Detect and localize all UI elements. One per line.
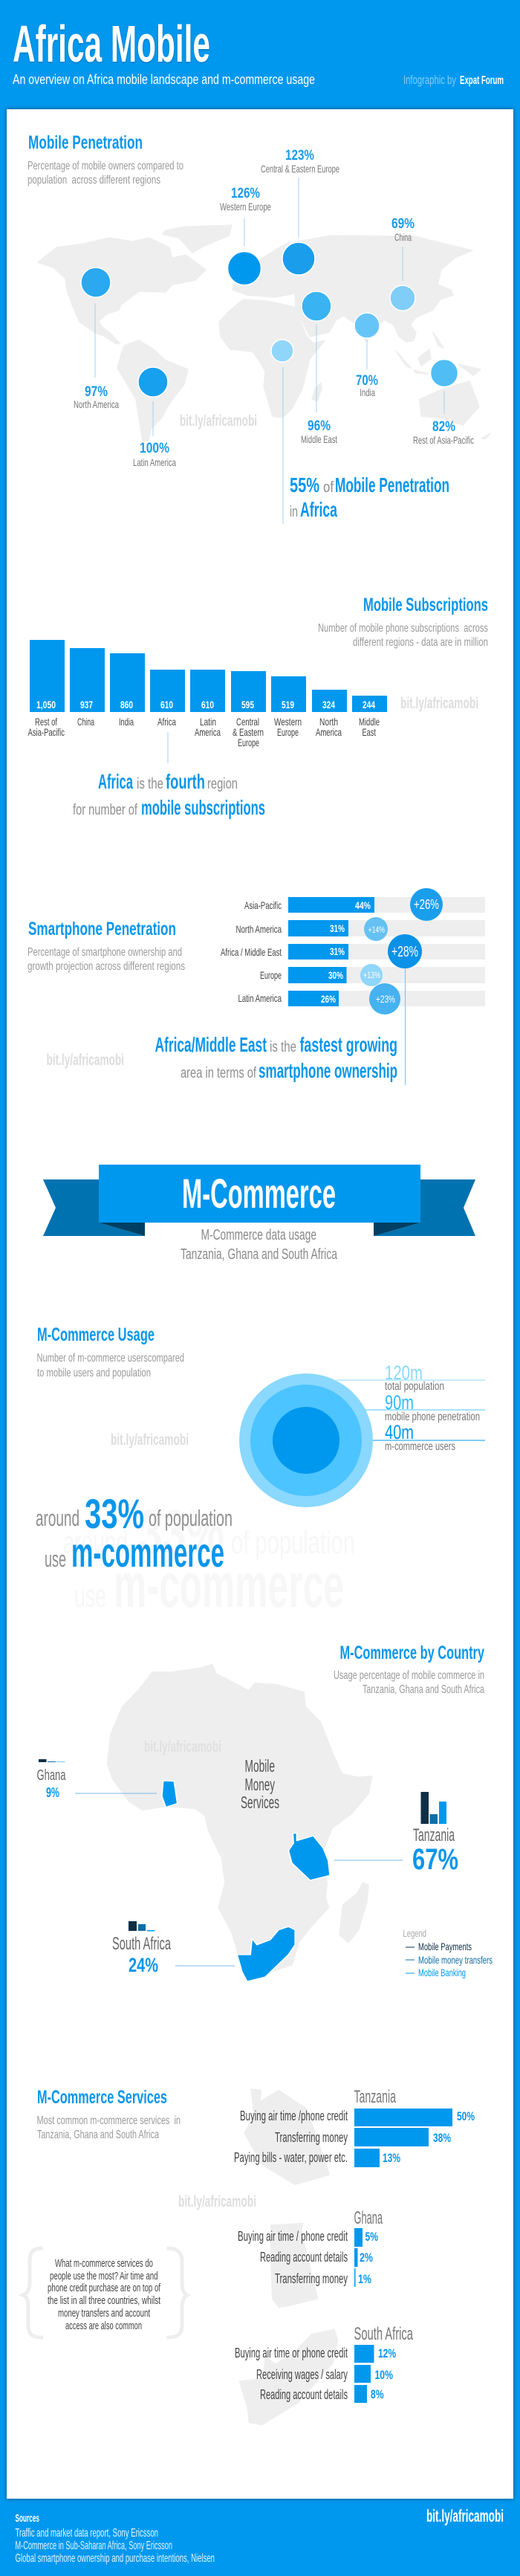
callout: of population <box>149 1505 233 1531</box>
ghana stat: Ghana <box>37 1767 66 1784</box>
quote with braces: access are also common <box>65 2320 142 2332</box>
callout: m-commerce <box>71 1529 224 1576</box>
label: central and eastern europe <box>261 148 339 175</box>
bar chart: 324 <box>322 699 335 711</box>
bar chart: south africa <box>235 2324 413 2403</box>
bar chart: 31% <box>330 945 345 957</box>
callout: around <box>36 1505 79 1531</box>
bar chart: America <box>316 726 342 738</box>
watermark: bit.ly/africamobi <box>111 1431 189 1449</box>
callout: smartphone ownership <box>259 1059 397 1082</box>
callout: 55% <box>290 473 319 496</box>
ghost text echo: m-commerce <box>114 1550 344 1620</box>
bar chart: tanzania: 38% <box>433 2131 451 2145</box>
label: north america: 97% <box>85 384 108 400</box>
map label: Money <box>245 1775 275 1794</box>
label: india: India <box>360 386 375 398</box>
bar chart: North America <box>236 923 282 935</box>
bar chart: Europe <box>277 726 299 738</box>
panel: smartphone penetration <box>27 888 485 1085</box>
ribbon subtitle <box>181 1227 338 1263</box>
bar chart: south africa: Buying air time or phone credit <box>235 2346 348 2360</box>
description: population across different regions <box>27 174 160 187</box>
stat: total population: 120m <box>385 1362 423 1384</box>
panel: m-commerce services <box>23 2087 475 2425</box>
label: china <box>391 216 415 243</box>
bar chart: 595 <box>241 699 254 711</box>
label: india <box>356 373 378 398</box>
watermark: bit.ly/africamobi <box>144 1738 221 1755</box>
callout: 33% <box>85 1490 144 1537</box>
description <box>37 1352 184 1379</box>
bar chart <box>28 640 387 748</box>
stat: mobile phone penetration <box>365 1391 485 1423</box>
callout: fastest growing <box>300 1033 397 1056</box>
sources list: M-Commerce in Sub-Saharan Africa, Sony Ericsson <box>15 2540 172 2552</box>
description: Percentage of mobile owners compared to <box>27 160 183 172</box>
growth bubble: north america: +14% <box>368 925 385 935</box>
ghost text echo <box>63 1497 355 1620</box>
panel: m-commerce usage <box>36 1324 485 1620</box>
bar chart: south africa: Receiving wages / salary <box>256 2367 348 2382</box>
heading: M-Commerce Services <box>37 2087 167 2108</box>
ghost text echo: of population <box>231 1524 355 1561</box>
label: latin america: 100% <box>140 441 169 456</box>
callout: use <box>45 1546 66 1572</box>
circle: china <box>390 285 415 311</box>
description: Number of m-commerce userscompared <box>37 1352 184 1365</box>
bar chart: East <box>363 726 376 738</box>
watermark: bit.ly/africamobi <box>180 412 257 430</box>
bar chart: Rest of <box>35 716 57 728</box>
bar chart: tanzania: Transferring money <box>275 2130 348 2145</box>
country shape: ghana <box>162 1781 178 1808</box>
callout: region <box>207 776 238 792</box>
bar chart: ghana <box>238 2208 383 2287</box>
callout: Africa/Middle East <box>155 1033 267 1056</box>
bar chart: ghana: 5% <box>365 2230 378 2244</box>
sources heading: Sources <box>15 2512 39 2525</box>
bar chart: 519 <box>282 699 294 711</box>
label: rest of asia-pacific: Rest of Asia-Pacific <box>413 434 474 446</box>
stat: mobile phone penetration: mobile phone penetration <box>385 1411 480 1423</box>
description: to mobile users and population <box>37 1367 151 1379</box>
label: latin america: Latin America <box>133 456 176 468</box>
growth bubble: latin america <box>369 983 400 1014</box>
world map <box>38 225 490 441</box>
circle: india <box>354 313 380 338</box>
label: north america: North America <box>74 398 119 410</box>
callout: fourth <box>166 770 205 793</box>
panel: m-commerce by country <box>37 1643 493 1981</box>
quote with braces: people use the most? Air time and <box>50 2270 157 2282</box>
south africa stat <box>112 1921 235 1976</box>
callout: Mobile Penetration <box>335 473 449 496</box>
panel: mobile penetration <box>27 132 490 524</box>
stat: m-commerce users: m-commerce users <box>385 1440 455 1453</box>
growth bubble: europe: +13% <box>363 970 380 980</box>
bar chart: tanzania: Paying bills - water, power etc. <box>234 2150 348 2165</box>
description: Tanzania, Ghana and South Africa <box>37 2129 159 2141</box>
heading: Smartphone Penetration <box>28 919 176 939</box>
bar chart: south africa: South Africa <box>354 2324 413 2344</box>
label: western europe: Western Europe <box>220 201 271 213</box>
callout <box>155 1033 397 1082</box>
bar chart: south africa: 8% <box>371 2387 383 2401</box>
bar chart: Africa / Middle East <box>221 946 282 958</box>
quote with braces: the list in all three countries, whilst <box>48 2294 161 2307</box>
subtitle: An overview on Africa mobile landscape and m-commerce usage <box>13 72 315 87</box>
bar chart: 44% <box>355 899 371 911</box>
label: china: China <box>394 231 412 243</box>
footer <box>15 2506 504 2565</box>
callout <box>73 770 265 819</box>
bar chart: 30% <box>328 969 343 981</box>
sources list <box>15 2527 215 2565</box>
bar chart: south africa: 10% <box>374 2368 393 2382</box>
callout: is the <box>270 1039 296 1055</box>
growth bubble: asia-pacific: +26% <box>414 897 439 912</box>
bar chart: North <box>319 716 338 728</box>
connector line <box>404 968 406 1085</box>
bar chart: ghana: 1% <box>358 2272 371 2286</box>
sources list: Global smartphone ownership and purchase intentions, Nielsen <box>15 2552 215 2565</box>
stat: total population <box>337 1362 485 1393</box>
description: growth projection across different regions <box>27 960 185 973</box>
quote with braces: What m-commerce services do <box>55 2257 153 2270</box>
bar chart: 860 <box>120 699 133 711</box>
bar chart: tanzania: Buying air time /phone credit <box>240 2109 348 2123</box>
bar chart: & Eastern <box>233 726 264 738</box>
bar chart: 31% <box>330 922 345 934</box>
circle: rest of asia-pacific <box>431 360 458 386</box>
bar chart: Central <box>236 716 259 728</box>
label: latin america <box>133 441 176 468</box>
watermark: bit.ly/africamobi <box>400 695 478 712</box>
stat: m-commerce users: 40m <box>385 1421 414 1443</box>
bar chart: ghana: Ghana <box>354 2208 383 2228</box>
bar chart: 610 <box>160 699 173 711</box>
callout: of <box>323 479 334 496</box>
concentric circles chart <box>239 1373 373 1507</box>
m-commerce ribbon banner <box>43 1165 475 1236</box>
credit: Infographic by <box>403 73 456 87</box>
callout: Africa <box>300 498 337 521</box>
legend <box>403 1927 493 1978</box>
connector lines <box>95 178 444 524</box>
bar chart: ghana: Reading account details <box>260 2250 348 2265</box>
callout <box>290 473 449 521</box>
circle: africa <box>271 340 293 362</box>
header <box>13 15 504 87</box>
tanzania stat <box>334 1792 458 1876</box>
ribbon subtitle: Tanzania, Ghana and South Africa <box>181 1246 338 1263</box>
legend: Legend <box>403 1927 426 1939</box>
legend: Mobile Payments <box>418 1941 472 1952</box>
quote with braces <box>23 2248 187 2337</box>
label: north america <box>74 384 119 410</box>
circle: central and eastern europe <box>282 242 315 275</box>
tanzania stat: 67% <box>412 1843 458 1876</box>
ghost text echo: around <box>63 1524 128 1561</box>
bar chart: China <box>77 716 94 728</box>
label: middle east: Middle East <box>301 433 337 445</box>
map label: Services <box>241 1793 279 1812</box>
bar chart: tanzania: 13% <box>383 2151 400 2165</box>
ghana stat: 9% <box>46 1785 59 1800</box>
sources list: Traffic and market data report, Sony Ericsson <box>15 2527 158 2540</box>
bar chart: ghana: 2% <box>360 2250 373 2265</box>
bar chart: tanzania: 50% <box>457 2109 475 2123</box>
africa map <box>108 1665 371 1979</box>
label: western europe: 126% <box>231 186 260 201</box>
bar chart: Europe <box>238 737 259 748</box>
watermark: bit.ly/africamobi <box>178 2193 256 2210</box>
growth bubble: africa / middle east: +28% <box>391 944 418 960</box>
quote with braces: money transfers and account <box>58 2307 151 2320</box>
callout: in <box>290 504 298 520</box>
stat: mobile phone penetration: 90m <box>385 1391 414 1414</box>
country shape: south africa <box>237 1926 295 1981</box>
connector line <box>167 732 169 763</box>
bar chart: Western <box>274 716 302 728</box>
ghost map: south africa <box>238 2329 338 2425</box>
bar chart: 1,050 <box>36 699 56 711</box>
bar chart: tanzania <box>234 2087 475 2167</box>
growth bubble: north america <box>364 917 388 941</box>
bar chart: south africa: 12% <box>378 2346 396 2360</box>
stat: m-commerce users <box>373 1421 485 1453</box>
bar chart: 26% <box>321 993 336 1005</box>
watermark: bit.ly/africamobi <box>46 1052 124 1069</box>
heading: Mobile Penetration <box>28 132 143 153</box>
stat: total population: total population <box>385 1380 444 1393</box>
growth bubble: europe <box>360 964 383 986</box>
panel: mobile subscriptions <box>28 595 488 819</box>
description <box>37 2114 181 2141</box>
label: central and eastern europe: Central & Eastern Europe <box>261 163 339 175</box>
ghost map: tanzania <box>244 2088 330 2185</box>
ghost text echo: use <box>74 1578 106 1614</box>
circle: north america <box>81 268 111 297</box>
bar chart: Middle <box>359 716 380 728</box>
callout: area in terms of <box>181 1065 256 1081</box>
ghost text echo: 33% <box>139 1497 224 1567</box>
callout: mobile subscriptions <box>141 796 265 819</box>
bar chart: India <box>119 716 134 728</box>
m-commerce ribbon banner: M-Commerce <box>182 1170 336 1217</box>
label: rest of asia-pacific <box>413 419 474 446</box>
quote with braces: phone credit purchase are on top of <box>48 2282 161 2294</box>
bar chart: Africa <box>157 716 176 728</box>
callout: Africa <box>98 770 133 793</box>
circle: latin america <box>138 367 168 397</box>
label: middle east <box>301 418 337 445</box>
bar chart: 610 <box>201 699 214 711</box>
bar chart <box>221 897 485 1006</box>
bar chart: Europe <box>260 969 282 981</box>
description: Most common m-commerce services in <box>37 2114 181 2127</box>
south africa stat: 24% <box>129 1954 158 1976</box>
growth bubble: latin america: +23% <box>376 993 395 1005</box>
bar chart: Latin America <box>238 992 282 1004</box>
ghana stat <box>37 1759 157 1800</box>
label: western europe <box>220 186 271 213</box>
label: central and eastern europe: 123% <box>285 148 314 164</box>
ghost map: ghana <box>270 2223 319 2308</box>
callout: is the <box>137 776 163 792</box>
description <box>27 946 185 973</box>
description <box>27 160 183 187</box>
bar chart: Asia-Pacific <box>244 899 282 911</box>
description <box>318 622 488 649</box>
south africa stat: South Africa <box>112 1934 171 1954</box>
heading: M-Commerce Usage <box>37 1324 155 1345</box>
map label <box>241 1756 279 1812</box>
bar chart: tanzania: Tanzania <box>354 2087 396 2107</box>
legend: Mobile Banking <box>418 1967 466 1978</box>
bar chart: Latin <box>200 716 216 728</box>
label: middle east: 96% <box>308 418 331 434</box>
circle: middle east <box>302 291 331 321</box>
callout <box>36 1490 233 1576</box>
map label: Mobile <box>245 1756 275 1776</box>
tanzania stat: Tanzania <box>413 1825 455 1845</box>
label: india: 70% <box>356 373 378 389</box>
label: rest of asia-pacific: 82% <box>432 419 455 435</box>
country shape: tanzania <box>288 1834 330 1880</box>
circle: western europe <box>227 251 261 285</box>
title: Africa Mobile <box>13 15 210 73</box>
description: Percentage of smartphone ownership and <box>27 946 182 959</box>
callout: for number of <box>73 802 137 818</box>
bar chart: America <box>195 726 221 738</box>
growth bubble: asia-pacific <box>410 888 443 921</box>
bar chart: ghana: Transferring money <box>275 2271 348 2286</box>
ribbon subtitle: M-Commerce data usage <box>201 1227 316 1243</box>
bar chart: Asia-Pacific <box>28 726 65 738</box>
description <box>334 1669 484 1696</box>
label: china: 69% <box>391 216 415 232</box>
bar chart: 937 <box>80 699 93 711</box>
bar chart: ghana: Buying air time / phone credit <box>238 2229 348 2244</box>
bar chart: south africa: Reading account details <box>260 2387 348 2402</box>
bar chart: 244 <box>363 699 375 711</box>
growth bubble: africa / middle east <box>388 934 422 968</box>
